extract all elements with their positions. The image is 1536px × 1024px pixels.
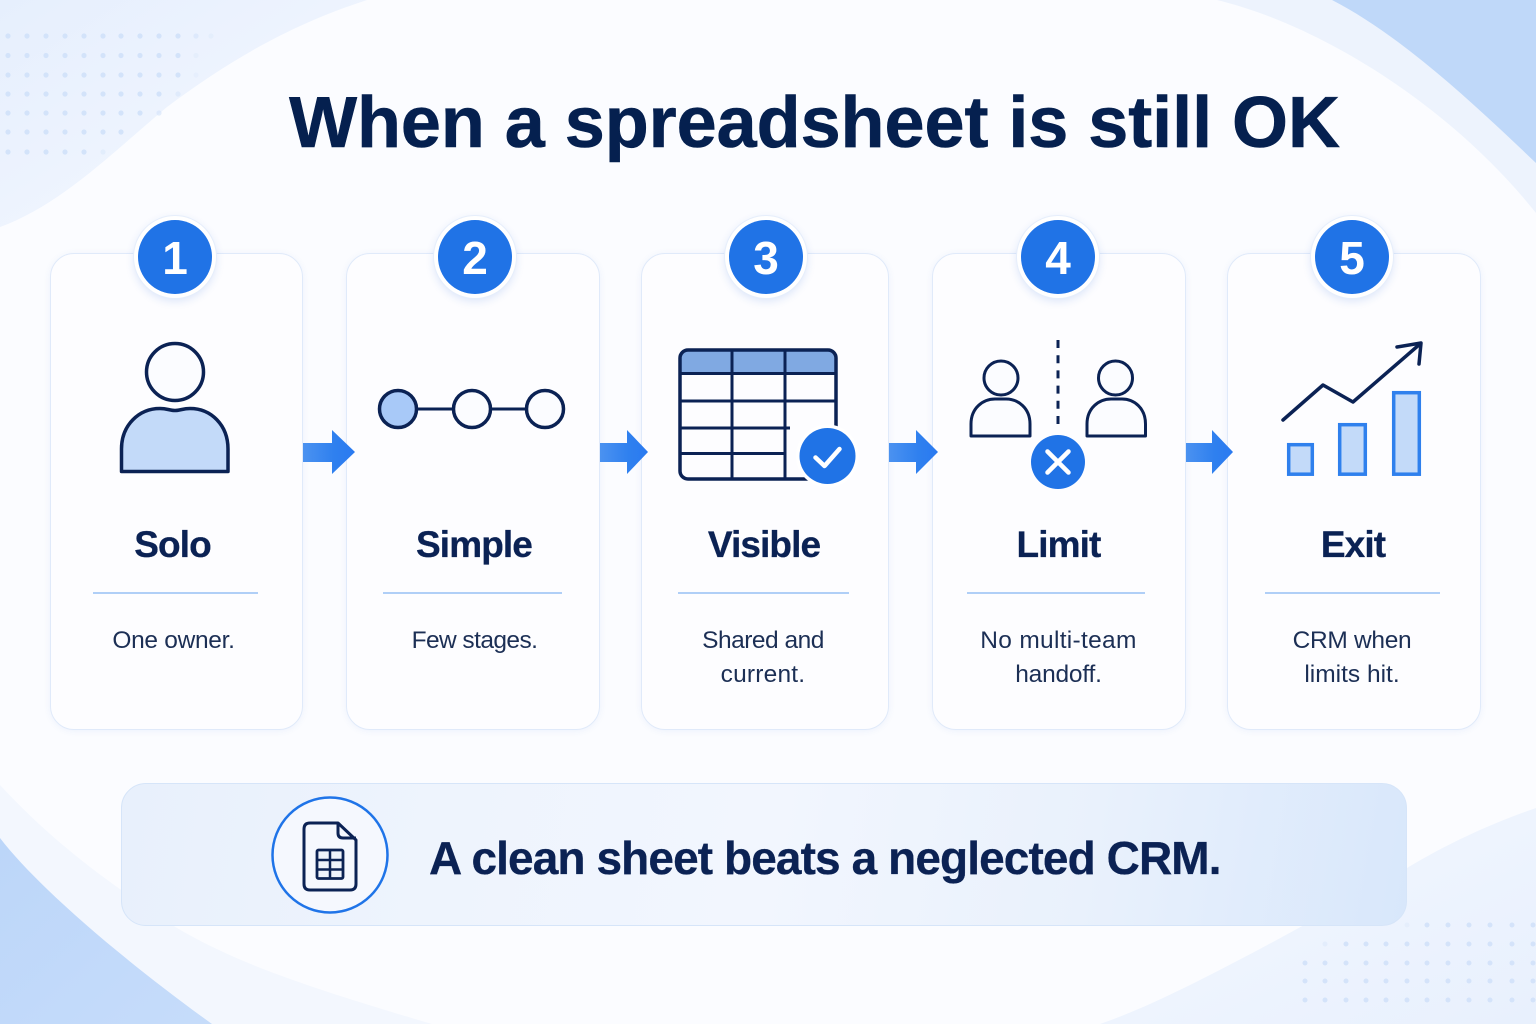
arrow 1 (303, 430, 355, 474)
text: limit description: handoff. (1015, 661, 1102, 688)
panel: exit (1227, 253, 1481, 730)
text: visible description: current. (721, 661, 805, 688)
heading: solo: Solo (134, 524, 211, 565)
number badge 3 (729, 220, 803, 294)
text: solo description: One owner. (112, 627, 235, 654)
arrow 3 (889, 430, 938, 474)
icon: shared table with check (678, 348, 856, 484)
number badge 5: 5 (1339, 232, 1365, 284)
number badge 3: 3 (753, 232, 779, 284)
text: exit description: limits hit. (1304, 661, 1400, 688)
text: limit description (980, 627, 1137, 688)
heading: visible: Visible (708, 524, 820, 565)
number badge 1: 1 (162, 232, 188, 284)
text: exit description: CRM when (1293, 627, 1411, 654)
panel: visible (641, 253, 889, 730)
text: visible description: Shared and (702, 627, 824, 654)
number badge 5 (1315, 220, 1389, 294)
number badge 1 (138, 220, 212, 294)
number badge 4 (1021, 220, 1095, 294)
arrow 2 (600, 430, 648, 474)
number badge 4: 4 (1045, 232, 1071, 284)
text: simple description: Few stages. (412, 627, 537, 654)
number badge 2 (438, 220, 512, 294)
icon: three stage nodes (378, 388, 566, 430)
title: When a spreadsheet is still OK (289, 83, 1340, 163)
icon: spreadsheet file (271, 796, 389, 914)
heading: simple: Simple (416, 524, 532, 565)
panel: solo (50, 253, 303, 730)
icon: growth bars and arrow (1281, 341, 1423, 476)
text: limit description: No multi-team (980, 627, 1137, 654)
panel: limit (932, 253, 1186, 730)
arrow 4 (1186, 430, 1233, 474)
heading: exit: Exit (1321, 524, 1385, 565)
icon: two people separated (970, 340, 1147, 489)
text: exit description (1293, 627, 1411, 688)
heading: limit: Limit (1017, 524, 1100, 565)
text: visible description (702, 627, 824, 688)
icon: person (120, 342, 230, 474)
callout text: A clean sheet beats a neglected CRM. (429, 832, 1221, 884)
panel: simple (346, 253, 600, 730)
callout banner (121, 783, 1407, 926)
number badge 2: 2 (462, 232, 488, 284)
